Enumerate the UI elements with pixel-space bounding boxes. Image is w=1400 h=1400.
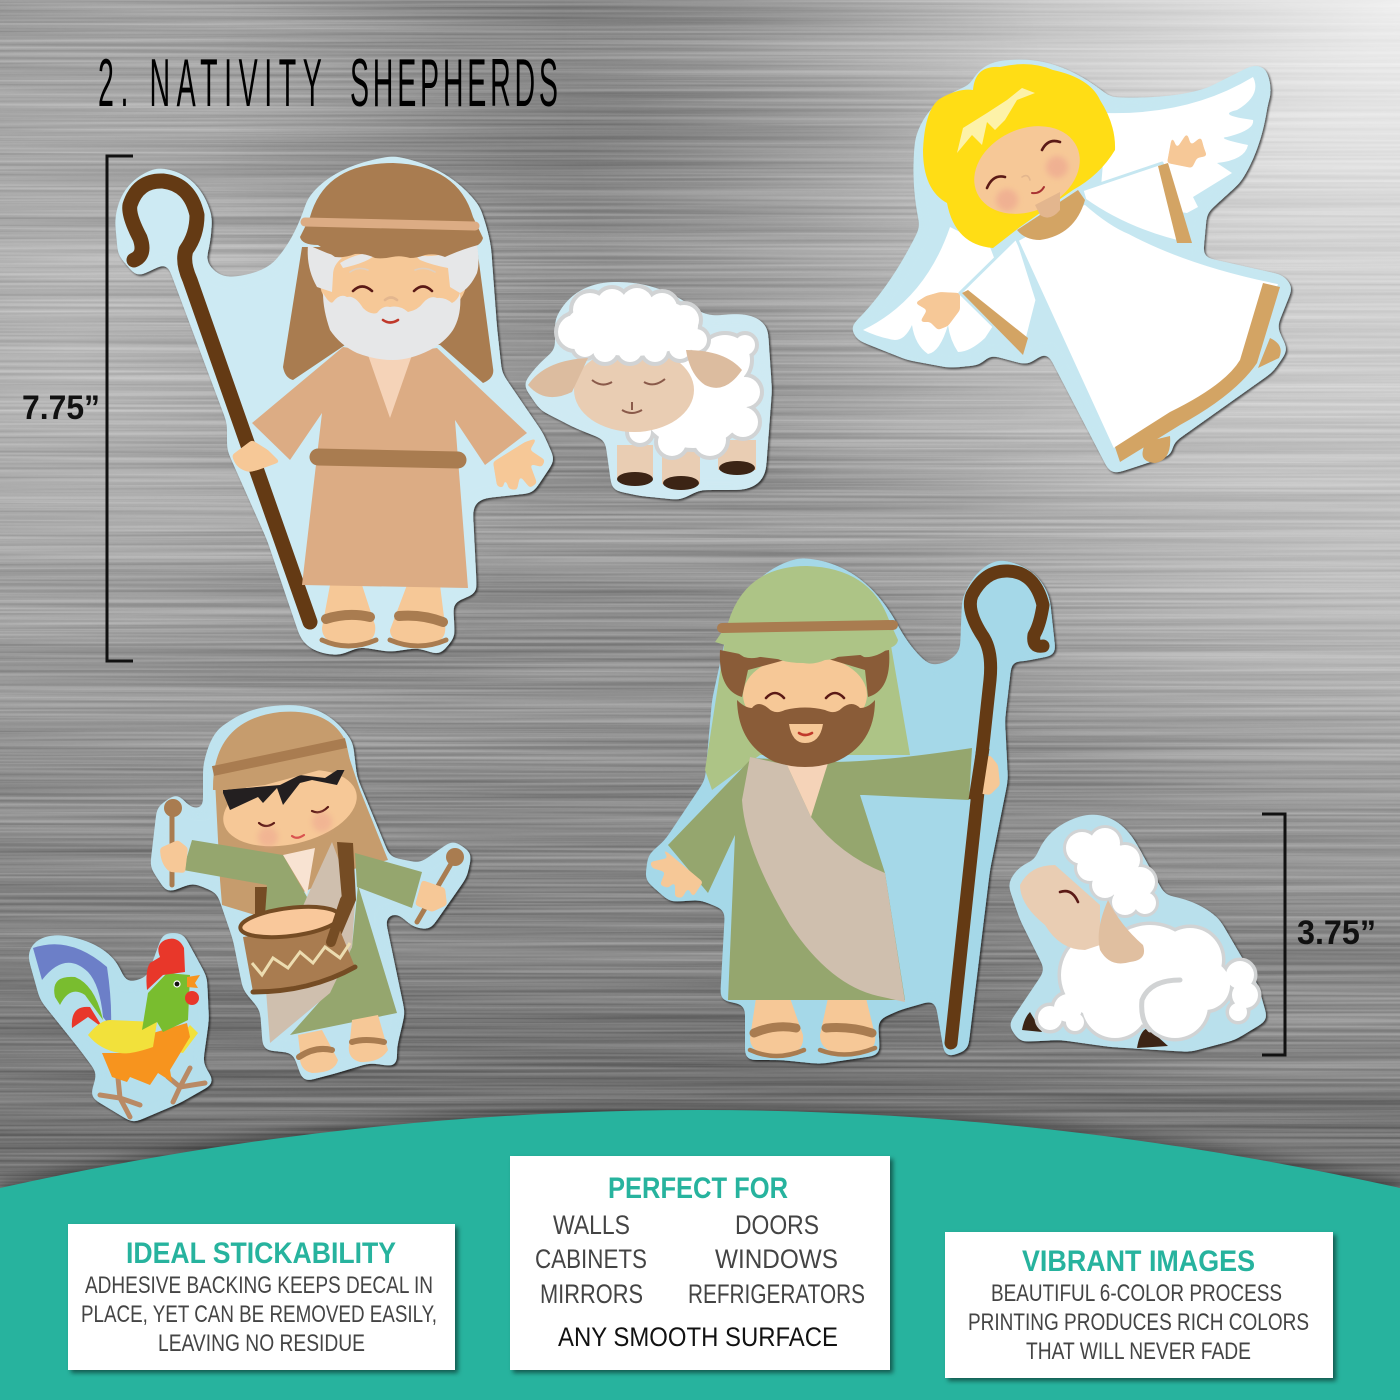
head wool [1066, 828, 1156, 915]
title: 2. NATIVITY [98, 46, 322, 122]
hip line [1142, 980, 1180, 1030]
dimension bracket: 7.75 inches [22, 156, 133, 661]
feet [1142, 338, 1281, 463]
sticker: angel [850, 59, 1293, 473]
face [216, 758, 364, 858]
card: perfect for: ANY SMOOTH SURFACE [558, 1322, 838, 1352]
card: perfect for: MIRRORS [540, 1279, 643, 1309]
ear [1099, 900, 1144, 964]
body [88, 973, 198, 1085]
blush [996, 156, 1068, 211]
card: ideal stickability [68, 1224, 455, 1370]
face features [259, 807, 328, 838]
card: vibrant images: THAT WILL NEVER FADE [1026, 1338, 1251, 1365]
body wool [629, 335, 760, 456]
hands [915, 133, 1207, 330]
feet and sandals [750, 998, 875, 1056]
robe [960, 163, 1280, 450]
head cloth [300, 163, 483, 258]
card: vibrant images: PRINTING PRODUCES RICH COLORS [968, 1309, 1309, 1336]
neck [1035, 192, 1060, 218]
card: perfect for: PERFECT FOR [608, 1172, 788, 1205]
tail feathers [33, 944, 111, 1028]
back hair cloth [283, 247, 493, 383]
comb [146, 939, 185, 990]
card: perfect for: DOORS [735, 1210, 819, 1240]
lamb face [592, 379, 665, 413]
legs and hooves [617, 440, 756, 490]
card: ideal stickability: LEAVING NO RESIDUE [158, 1330, 365, 1357]
face features [766, 693, 844, 735]
card: perfect for: WINDOWS [715, 1244, 838, 1274]
face [960, 110, 1094, 230]
teal hill panel [0, 1105, 1400, 1400]
title [98, 46, 558, 122]
gold trim [962, 163, 1280, 462]
lamb face [1060, 891, 1078, 902]
card: ideal stickability: PLACE, YET CAN BE REMOVED EASILY, [81, 1301, 437, 1328]
sticker: resting lamb [1008, 814, 1268, 1052]
dimension bracket: 3.75 inches [1262, 814, 1376, 1055]
hands [232, 438, 545, 490]
robe [183, 840, 422, 1043]
dimension bracket: 7.75 inches: 7.75” [22, 389, 100, 427]
headband [305, 222, 475, 226]
blush [258, 812, 332, 847]
black hair [223, 763, 348, 810]
head cloth [213, 712, 352, 790]
face features [350, 268, 435, 322]
beard [323, 293, 460, 360]
dimension bracket: 3.75 inches: 3.75” [1297, 914, 1376, 952]
legs [100, 1068, 205, 1117]
card: perfect for: CABINETS [535, 1244, 647, 1274]
robe [252, 347, 527, 588]
eye [174, 981, 180, 987]
card: ideal stickability: ADHESIVE BACKING KEEPS DECAL IN [85, 1272, 433, 1299]
title: SHEPHERDS [350, 46, 558, 122]
hands [160, 840, 447, 912]
sticker: elderly shepherd with staff [115, 156, 555, 655]
feet [298, 1015, 388, 1073]
sticker: drummer boy [150, 705, 472, 1082]
back hair cloth [215, 745, 388, 915]
wings [863, 77, 1255, 354]
face features [987, 141, 1060, 193]
sticks [164, 799, 464, 922]
headband [213, 743, 346, 771]
beard [737, 700, 875, 767]
mouth [789, 724, 823, 743]
face [743, 655, 867, 735]
belt [318, 457, 458, 460]
sticker: rooster [28, 933, 215, 1123]
ears [528, 350, 742, 397]
hair highlight [957, 88, 1035, 153]
beak [187, 975, 200, 988]
hair [720, 650, 889, 697]
head cloth [715, 566, 898, 664]
face [574, 348, 694, 432]
hooves [1022, 1012, 1168, 1048]
head wool [558, 288, 707, 362]
white side hair [308, 245, 478, 293]
sticker: bearded shepherd with staff [645, 558, 1056, 1064]
neckline [787, 763, 828, 817]
card: perfect for: WALLS [553, 1210, 630, 1240]
neckline [368, 355, 412, 418]
feet and sandals [322, 585, 446, 646]
staff over hand [975, 748, 983, 800]
staff [951, 571, 1043, 1043]
face [320, 241, 466, 325]
wattle [185, 991, 199, 1005]
body wool [1038, 925, 1258, 1038]
drum [239, 900, 355, 992]
back cloak [705, 640, 910, 790]
hair [923, 64, 1115, 248]
headband [722, 625, 893, 628]
straps [255, 842, 356, 945]
staff [130, 181, 310, 622]
hands [650, 755, 1000, 898]
card: vibrant images: VIBRANT IMAGES [1022, 1245, 1255, 1278]
sticker: standing lamb [523, 282, 772, 500]
card: vibrant images [945, 1232, 1333, 1378]
card: ideal stickability: IDEAL STICKABILITY [126, 1237, 396, 1270]
robe [668, 748, 972, 1000]
card: perfect for: REFRIGERATORS [688, 1279, 865, 1309]
card: vibrant images: BEAUTIFUL 6-COLOR PROCESS [991, 1280, 1282, 1307]
card: perfect for [510, 1156, 890, 1370]
sash [742, 757, 905, 1002]
face [1020, 865, 1100, 950]
